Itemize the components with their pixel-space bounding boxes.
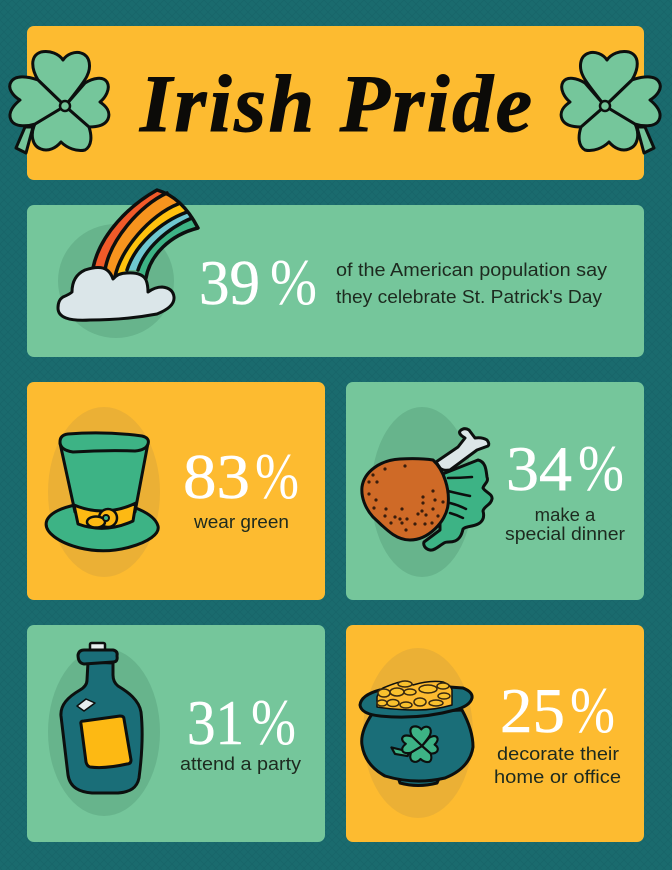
icon: pot of gold — [360, 681, 473, 786]
text: decorate their home or office — [494, 743, 621, 787]
text: celebrate description: of the American population say — [336, 259, 608, 280]
text: celebrate description — [336, 259, 608, 307]
text: make a special dinner — [505, 504, 625, 544]
icon: right shamrock — [561, 51, 660, 153]
text: wear green: wear green — [193, 511, 289, 532]
stat: 31% — [187, 686, 296, 759]
icon: turkey leg — [362, 429, 492, 550]
stat: 83%: 83 — [183, 441, 250, 512]
stat: 39%: % — [270, 246, 317, 319]
title: Irish Pride — [139, 58, 532, 149]
icon: bottle — [61, 643, 142, 793]
text: celebrate description: they celebrate St. Patrick's Day — [336, 286, 603, 307]
stat: 83%: % — [255, 440, 299, 513]
stat: 39% — [199, 246, 317, 319]
stat: 34% — [506, 432, 624, 505]
stat: 34%: % — [578, 432, 624, 505]
panel: 83% wear green — [27, 382, 325, 600]
panel: 31% attend a party — [27, 625, 325, 842]
text: make a special dinner: special dinner — [505, 523, 625, 544]
stat: 25% — [500, 674, 615, 747]
text: decorate their home or office: home or office — [494, 766, 621, 787]
icon: green top hat — [46, 433, 158, 551]
stat: 34%: 34 — [506, 433, 572, 504]
panel: 34% special dinner — [346, 382, 644, 600]
stat: 31%: 31 — [187, 687, 244, 758]
text: attend a party: attend a party — [180, 753, 302, 774]
text: make a special dinner: make a — [535, 504, 596, 525]
stat: 31%: % — [251, 686, 296, 759]
icon: shamrock on pot — [391, 726, 438, 762]
panel: title banner — [10, 26, 660, 180]
panel: 39% celebrate — [27, 190, 644, 357]
stat: 25%: % — [570, 674, 615, 747]
stat: 39%: 39 — [199, 247, 260, 318]
icon: rainbow and cloud — [58, 190, 198, 320]
icon: left shamrock — [10, 51, 109, 153]
stat: 83% — [183, 440, 299, 513]
panel: 25% decorate — [346, 625, 644, 842]
text: decorate their home or office: decorate their — [497, 743, 619, 764]
stat: 25%: 25 — [500, 675, 565, 746]
